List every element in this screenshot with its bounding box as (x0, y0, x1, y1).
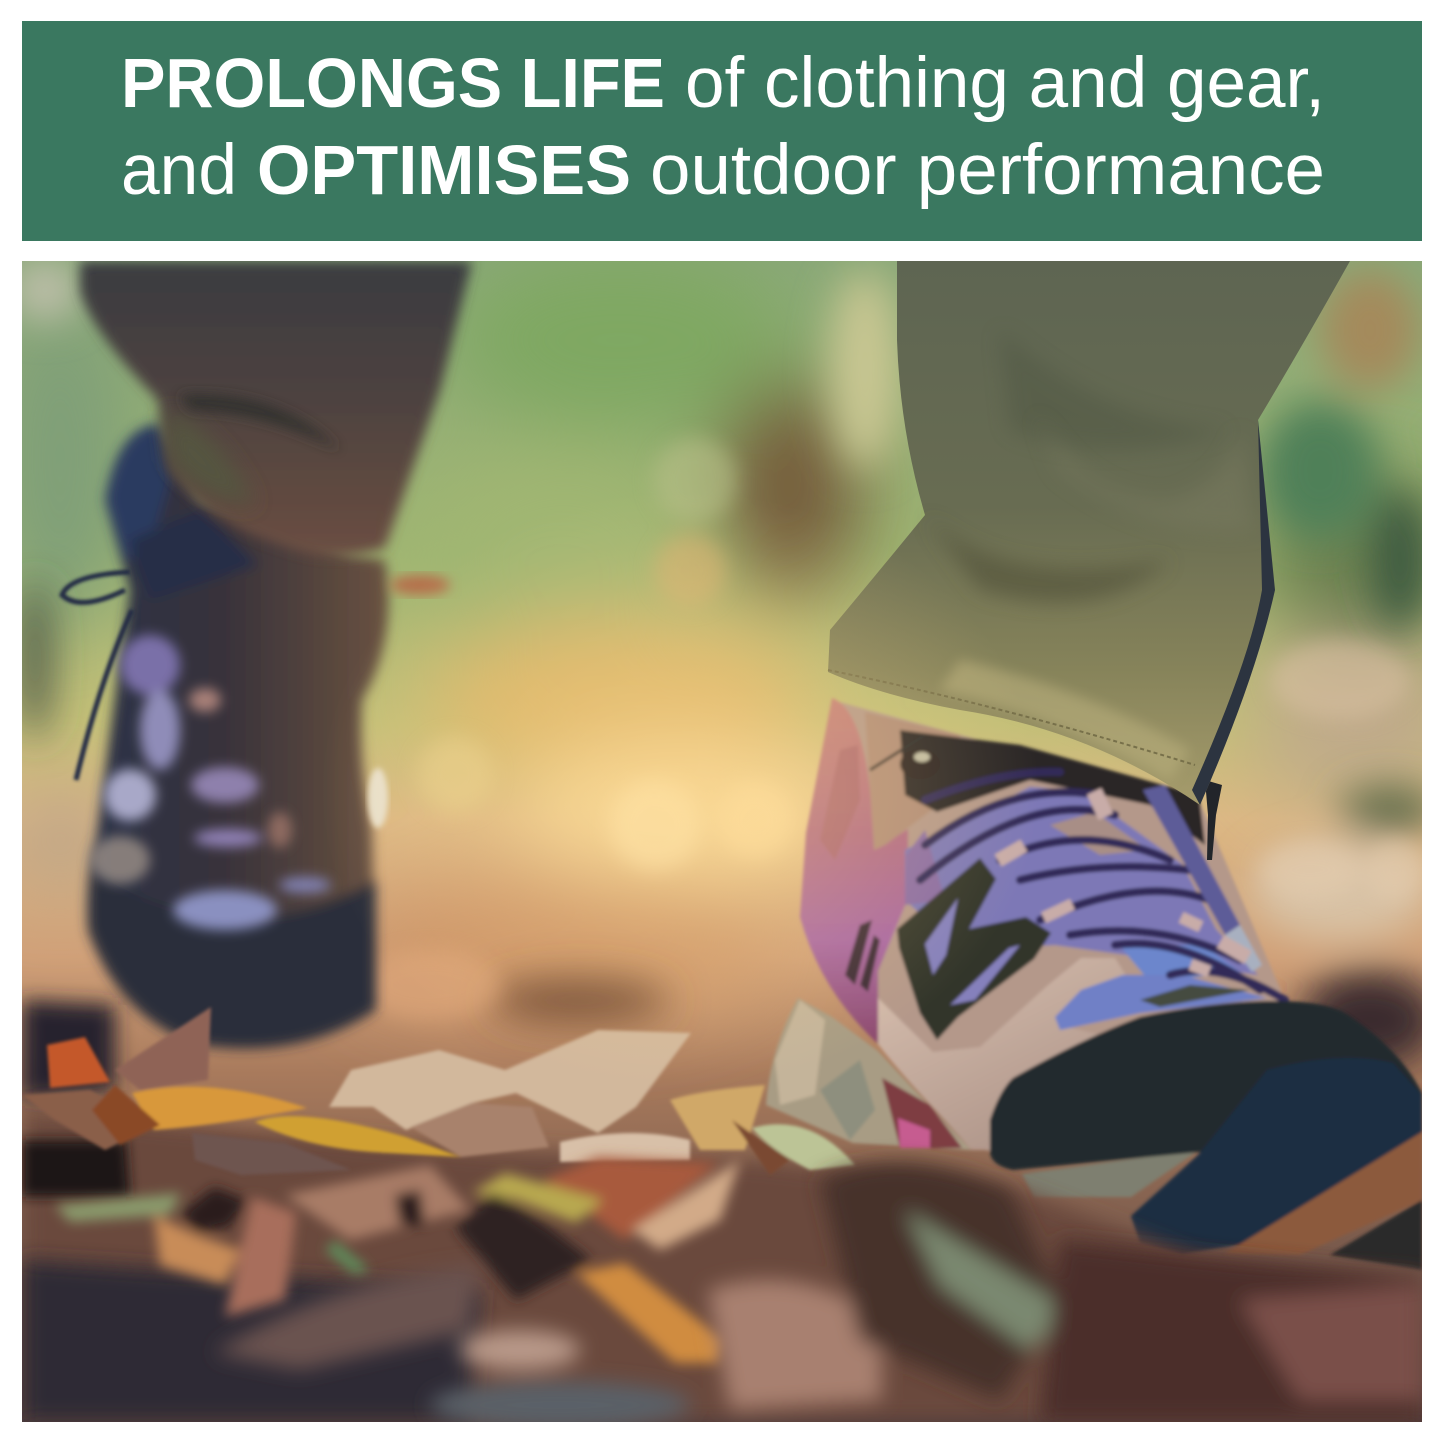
heading line 2: OPTIMISES (257, 131, 631, 209)
left boot lace (62, 572, 132, 780)
title banner (22, 21, 1422, 241)
trouser fold shadows (925, 515, 1170, 602)
right boot (766, 698, 1422, 1270)
left boot (out of focus) (62, 424, 388, 1048)
lace end (1143, 785, 1240, 935)
right trouser leg (828, 261, 1350, 805)
heading line 2: and (121, 131, 237, 210)
blurred forest background (0, 250, 1445, 1070)
heading line 1 (121, 44, 1325, 123)
heading line 1: PROLONGS LIFE (121, 44, 665, 122)
heading line 1: of clothing and gear, (685, 44, 1325, 123)
far foreground blur (214, 1162, 1422, 1429)
tan collar (865, 712, 960, 850)
heading line 2: outdoor performance (650, 131, 1325, 210)
dark inner collar (900, 730, 1205, 845)
in-focus leaves (22, 1007, 855, 1175)
pink heel panel (800, 698, 908, 1044)
blue toe window (1055, 975, 1267, 1030)
tan toe overlay (876, 958, 1124, 1124)
boot sole and lugs (766, 998, 971, 1150)
navy toe bumper (1131, 1058, 1422, 1254)
black toe cap (990, 1001, 1422, 1170)
mid-blur leaves (55, 1157, 740, 1363)
heel slots (845, 920, 872, 985)
laces (920, 772, 1285, 1000)
orange sole edge (1224, 1132, 1422, 1255)
lace eyelets (995, 788, 1252, 977)
foreground leaves (22, 1000, 1422, 1429)
dark suede overlay (897, 858, 1051, 1040)
boot hook (1205, 780, 1222, 860)
purple mesh tongue (905, 787, 1258, 975)
heading line 2 (121, 131, 1325, 210)
sunlight haze overlay (320, 490, 1040, 1090)
boot upper base (802, 700, 1285, 1150)
ground shadow (22, 1110, 1422, 1422)
left trouser leg (80, 261, 472, 595)
tongue tan patch (1050, 812, 1148, 855)
rubber sole ridge (1022, 1150, 1199, 1197)
pale leaf beside left boot (368, 768, 388, 828)
